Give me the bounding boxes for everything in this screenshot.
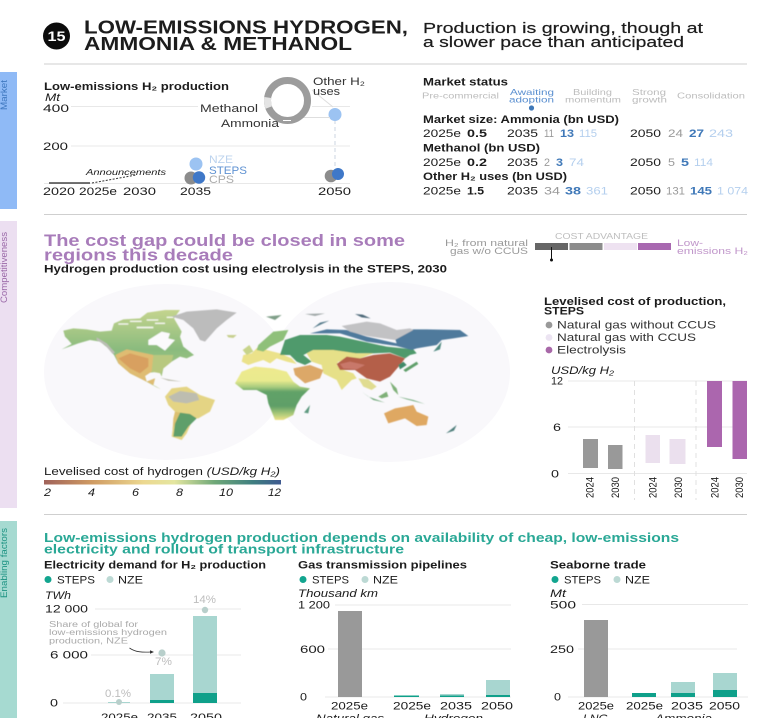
x axis labels: 2025e [626, 700, 663, 712]
market size: methanol: 2 [544, 157, 550, 169]
y axis labels: 0 [551, 468, 559, 480]
title: AMMONIA & METHANOL [84, 34, 352, 54]
heading: enabling factors [44, 530, 679, 556]
y axis labels: 400 [43, 103, 69, 115]
y axis labels: 200 [43, 141, 68, 153]
y axis labels: 0 [50, 698, 58, 710]
x axis labels: 2030 [673, 477, 685, 498]
scenario labels [209, 154, 247, 186]
x axis labels [584, 477, 746, 498]
bars: hydrogen STEPS [394, 695, 510, 697]
annotation: production, NZE [49, 636, 128, 646]
world map [44, 282, 510, 462]
status stages: Consolidation [677, 90, 745, 100]
points 2035 [184, 158, 205, 184]
unit label: Mt [550, 588, 567, 600]
chart legend: STEPS [564, 574, 601, 586]
y axis labels [45, 604, 88, 710]
unit label: USD/kg H₂ [551, 365, 615, 377]
chart heading: Gas transmission pipelines [298, 560, 467, 572]
market size: other H2 uses: 1.5 [467, 186, 484, 198]
heading: enabling factors: electricity and rollout of transport infrastructure [44, 542, 404, 556]
scenario labels: STEPS [209, 165, 247, 177]
y axis labels: 6 [553, 422, 561, 434]
x axis labels: 2050 [318, 186, 351, 198]
y axis labels: 1 200 [298, 600, 330, 612]
chart: seaborne trade [550, 560, 748, 718]
chart legend [546, 320, 716, 356]
annotation: Share of global for [49, 620, 138, 629]
market size: ammonia: 243 [709, 128, 733, 140]
chart legend: NZE [625, 574, 650, 586]
x axis labels: 2025e [393, 700, 431, 712]
status stages: growth [632, 94, 667, 104]
donut labels: Methanol [200, 103, 258, 115]
map: Americas [62, 309, 237, 440]
scenario labels: NZE [209, 154, 233, 166]
x axis labels: 2035 [440, 700, 472, 712]
section tab: Competitiveness [0, 221, 17, 508]
chart: electricity demand for H2 production [44, 560, 266, 718]
x axis labels [578, 700, 740, 712]
status stages: Strong [632, 87, 666, 97]
market size: ammonia: 2050 [630, 128, 661, 140]
chart legend [44, 574, 143, 586]
subtitle: Production is growing, though at [423, 20, 704, 37]
x axis labels: 2030 [123, 186, 156, 198]
status stages: Building [573, 87, 612, 97]
market size: ammonia: 11 [544, 128, 554, 140]
chart legend [552, 574, 650, 586]
bars: STEPS [150, 693, 217, 703]
market size: methanol: 5 [681, 157, 689, 169]
market size: methanol [423, 142, 713, 169]
scale left label: gas w/o CCUS [450, 246, 528, 257]
market size: ammonia: 0.5 [467, 128, 487, 140]
market size: ammonia: 2035 [507, 128, 538, 140]
donut labels: Other H₂ [313, 76, 365, 88]
market size: other H2 uses: 2025e [423, 186, 461, 198]
title [84, 18, 408, 54]
status marker [529, 105, 534, 111]
scale right label [677, 238, 748, 257]
colour ramp [44, 480, 281, 484]
status stages [422, 87, 745, 104]
chart heading: Levelised cost of production, [544, 296, 726, 308]
cost advantage scale [445, 231, 748, 262]
arrow [130, 648, 154, 654]
chart legend: Natural gas without CCUS [557, 320, 716, 332]
status stages: adoption [509, 94, 554, 104]
market size: other H2 uses: 131 [666, 186, 685, 198]
bar: natural gas [338, 611, 362, 697]
leader lines [290, 90, 333, 118]
chart legend [300, 574, 398, 586]
x axis labels: 2025e [79, 186, 117, 198]
map legend [43, 466, 281, 499]
announcements dashed line [92, 175, 136, 183]
x axis labels: 2050 [709, 700, 740, 712]
share labels: 7% [155, 656, 172, 668]
x axis labels: 2025e [578, 700, 614, 712]
market size: other H2 uses: Other H₂ uses (bn USD) [423, 171, 567, 183]
donut labels: uses [313, 86, 341, 98]
market size: ammonia: 115 [579, 128, 597, 140]
group labels [583, 713, 712, 718]
market size: methanol: 5 [668, 157, 675, 169]
y axis labels: 600 [300, 644, 325, 656]
market size: other H2 uses: 34 [544, 186, 560, 198]
bars: natural gas without CCUS [583, 439, 622, 469]
y axis labels: 6 000 [50, 650, 88, 662]
bars: ammonia NZE [671, 673, 737, 697]
market size: ammonia: 2025e [423, 128, 461, 140]
chart: levelised cost of production [544, 296, 747, 500]
scale swatches [535, 243, 671, 250]
historical line [49, 182, 90, 184]
donut labels [200, 76, 365, 130]
chart heading: Electricity demand for H₂ production [44, 560, 266, 572]
market size: methanol: Methanol (bn USD) [423, 142, 540, 154]
map background lobes [44, 282, 510, 462]
chart legend: NZE [373, 574, 398, 586]
subtitle: a slower pace than anticipated [423, 34, 684, 51]
market size: methanol: 114 [694, 157, 713, 169]
market status heading: Market status [423, 76, 508, 88]
y axis labels: 250 [550, 644, 574, 656]
market size: methanol: 2050 [630, 157, 661, 169]
share labels: 14% [193, 594, 216, 606]
points 2050 [325, 108, 344, 182]
ramp labels [43, 487, 281, 499]
y axis labels [298, 600, 330, 704]
x axis labels: 2030 [734, 477, 746, 498]
ramp labels: 10 [219, 487, 233, 499]
heading: cost gap [44, 232, 405, 264]
section tab: Enabling factors [0, 521, 17, 718]
x axis labels [101, 712, 222, 718]
x axis labels: 2035 [180, 186, 211, 198]
bars: electrolysis [707, 381, 747, 459]
x axis labels: 2035 [671, 700, 703, 712]
x axis labels: 2050 [481, 700, 513, 712]
ramp labels: 12 [268, 487, 281, 499]
x axis labels [331, 700, 513, 712]
legend title: Levelised cost of hydrogen (USD/kg H₂) [44, 466, 280, 478]
unit label: TWh [45, 590, 71, 602]
bars: hydrogen NZE [440, 680, 510, 697]
chart heading: Low-emissions H₂ production [44, 81, 229, 93]
bar: LNG [584, 620, 608, 697]
market size: methanol: 3 [556, 157, 563, 169]
annotation: low-emissions hydrogen [49, 628, 167, 637]
heading: enabling factors: Low-emissions hydrogen production depends on availability of cheap, low-emissions [44, 530, 679, 545]
status stages: Pre-commercial [422, 90, 499, 100]
x axis labels: 2020 [43, 186, 75, 198]
market size: other H2 uses: 38 [565, 186, 581, 198]
market size: other H2 uses: 145 [690, 186, 712, 198]
bars: natural gas with CCUS [646, 435, 686, 464]
ramp labels: 4 [88, 487, 95, 499]
annotation [49, 620, 167, 646]
scale title: COST ADVANTAGE [555, 231, 648, 241]
scenario labels: CPS [209, 174, 234, 186]
map: Europe, Africa, Asia, Oceania [235, 313, 468, 433]
ramp labels: 8 [176, 487, 183, 499]
badge: number 15: 15 [48, 28, 66, 44]
panel: market status [422, 76, 748, 198]
bars: ammonia STEPS [632, 690, 737, 697]
bars: NZE [108, 616, 217, 703]
y axis labels: 12 [551, 376, 563, 388]
market size: methanol: 74 [569, 157, 584, 169]
market size: other H2 uses: 2050 [630, 186, 661, 198]
scale right label: emissions H₂ [677, 246, 748, 257]
chart legend: STEPS [312, 574, 349, 586]
chart legend: NZE [118, 574, 143, 586]
x axis labels: 2025e [331, 700, 368, 712]
ramp labels: 6 [132, 487, 139, 499]
status stages: momentum [565, 94, 621, 104]
scale right label: Low- [677, 238, 703, 249]
y axis labels: 12 000 [45, 604, 88, 616]
y axis labels [551, 376, 563, 480]
scale left label: H₂ from natural [445, 238, 528, 249]
market size: other H2 uses: 361 [586, 186, 608, 198]
market size: other H2 uses: 2035 [507, 186, 538, 198]
market size: ammonia: 24 [668, 128, 683, 140]
chart heading: Seaborne trade [550, 560, 646, 572]
market size: other H2 uses [423, 171, 748, 198]
chart heading [544, 296, 726, 318]
x axis labels: 2024 [710, 477, 722, 498]
map heading: Hydrogen production cost using electrolysis in the STEPS, 2030 [44, 264, 447, 276]
market size: ammonia: Market size: Ammonia (bn USD) [423, 114, 619, 126]
y axis labels [550, 600, 576, 704]
heading: cost gap: regions this decade [44, 246, 233, 264]
x axis labels: 2024 [648, 477, 660, 498]
share markers [116, 607, 208, 705]
market size: ammonia: 13 [560, 128, 574, 140]
x axis labels: 2030 [610, 477, 622, 498]
donut: share of uses [267, 80, 308, 121]
section tab: Market [0, 72, 17, 209]
chart: gas transmission pipelines [298, 560, 513, 718]
chart heading: STEPS [544, 306, 584, 318]
heading: cost gap: The cost gap could be closed in some [44, 232, 405, 250]
badge: number 15 [43, 22, 70, 50]
title: LOW-EMISSIONS HYDROGEN, [84, 18, 408, 38]
chart: low-emissions H2 production [43, 76, 365, 198]
group labels [316, 713, 483, 718]
share labels [105, 594, 216, 700]
y axis labels: 500 [550, 600, 576, 612]
announcements label: Announcements [85, 167, 167, 177]
y axis labels [43, 103, 69, 153]
y axis labels: 0 [300, 692, 307, 704]
chart legend: STEPS [57, 574, 95, 586]
ramp labels: 2 [43, 487, 51, 499]
subtitle [423, 20, 704, 51]
scale left label [445, 238, 528, 257]
x axis labels [43, 186, 351, 198]
market size: ammonia: 27 [689, 128, 704, 140]
market size: ammonia [423, 114, 733, 140]
market size: methanol: 2025e [423, 157, 461, 169]
chart legend: Electrolysis [557, 344, 627, 356]
scale marker [550, 247, 553, 262]
chart legend: Natural gas with CCUS [557, 332, 696, 344]
market size: methanol: 0.2 [467, 157, 487, 169]
unit label: Mt [45, 92, 61, 104]
unit label: Thousand km [298, 588, 378, 600]
share labels: 0.1% [105, 688, 131, 700]
market size: methanol: 2035 [507, 157, 538, 169]
status stages: Awaiting [510, 87, 554, 97]
y axis labels: 0 [554, 692, 561, 704]
donut labels: Ammonia [221, 118, 279, 130]
market size: other H2 uses: 1 074 [717, 186, 748, 198]
x axis labels: 2024 [584, 477, 596, 498]
